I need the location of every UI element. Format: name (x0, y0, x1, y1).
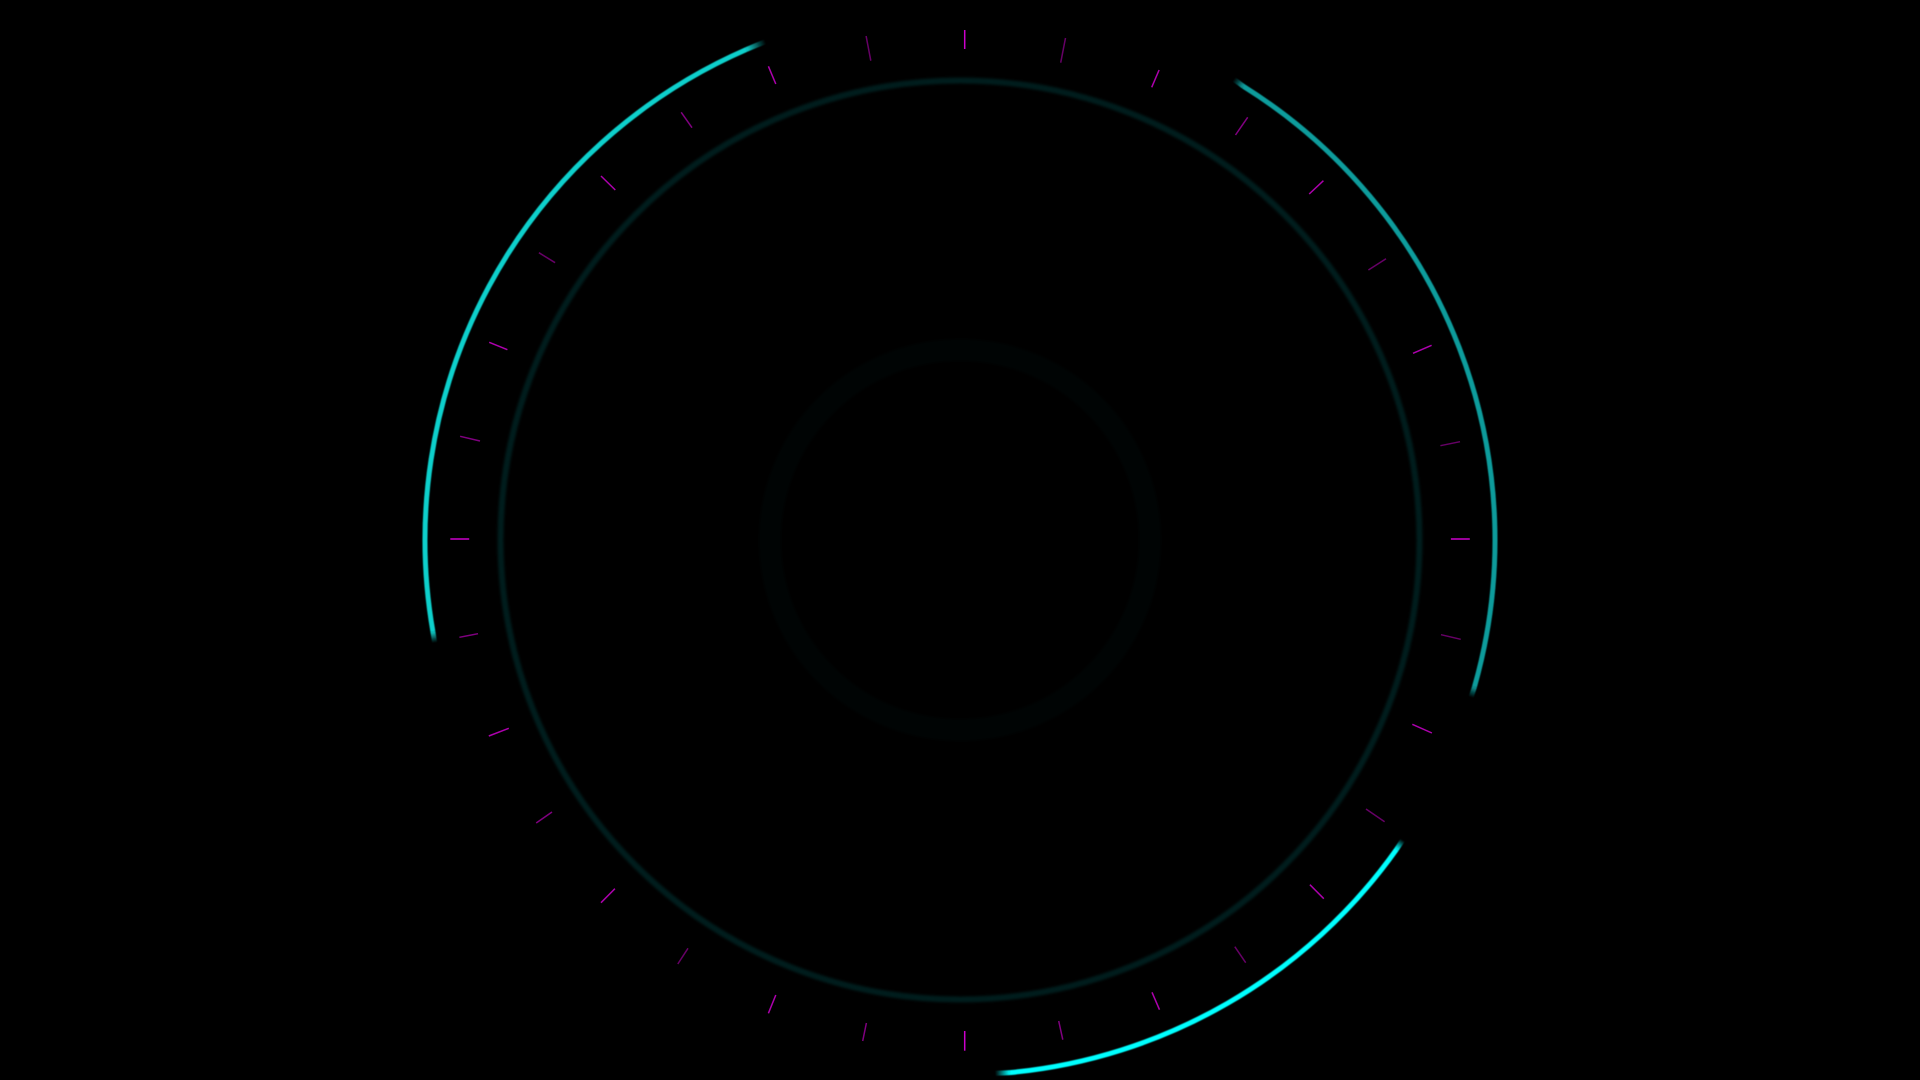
outer arc: left (425, 42, 765, 643)
outer arc: right (1234, 79, 1495, 697)
inner faint ring (770, 350, 1150, 730)
magenta tick ring (450, 30, 1470, 1051)
middle dim ring (500, 80, 1420, 1000)
outer arc: bottom (995, 840, 1403, 1073)
